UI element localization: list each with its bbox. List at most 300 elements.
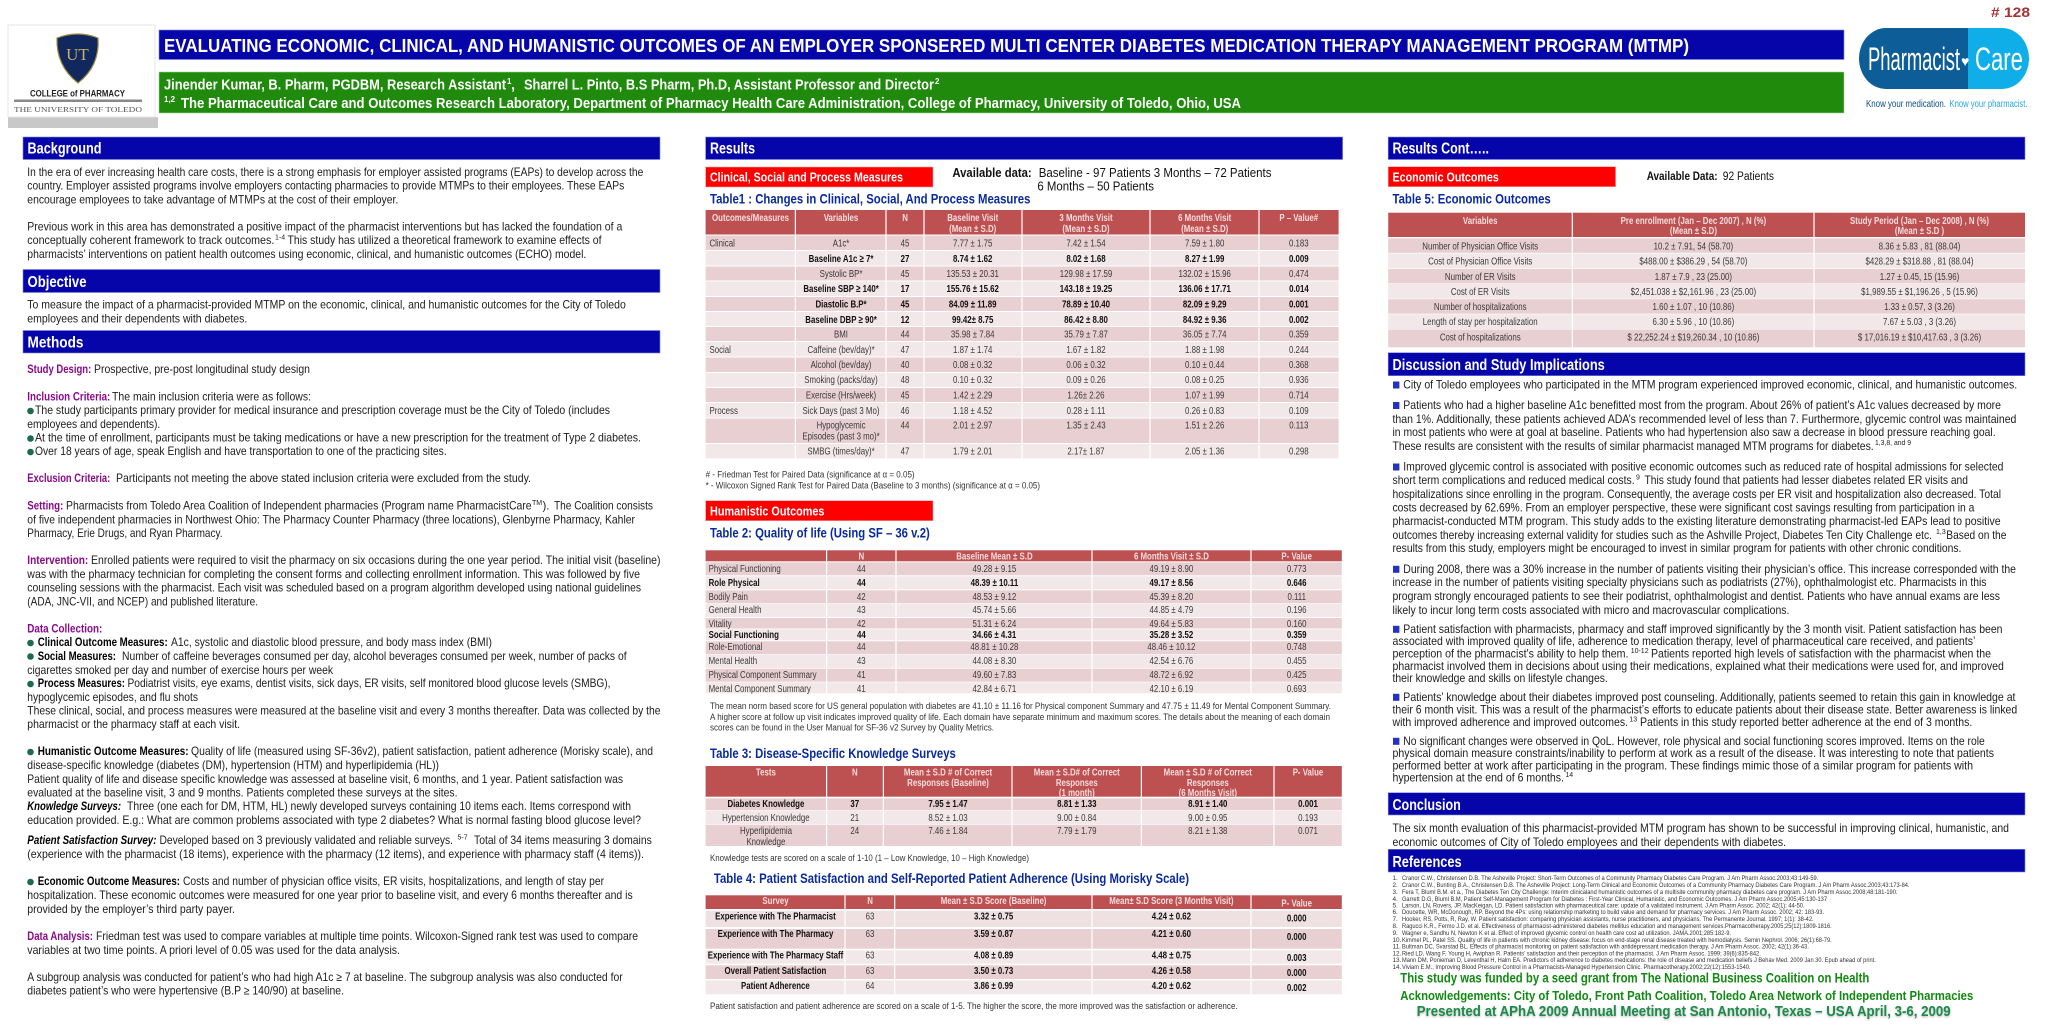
table 4 rows: 3.50 ± 0.73 [974,965,1013,976]
table 4 rows: Patient Adherence [741,980,810,991]
table 1 rows: 155.76 ± 15.62 [946,283,999,294]
table 2 rows: 0.748 [1287,641,1307,652]
text block: background paragraphs: country. Employer assisted programs involve employers contacting pharmacies to provide MTMPs to their employees. These EAPs [27,180,624,192]
subheading: humanistic outcomes: Humanistic Outcomes [710,504,824,518]
table 4 rows: 0.003 [1287,952,1307,963]
authors and affiliation banner: 1,2 [164,95,176,104]
subheading: humanistic outcomes [706,501,933,521]
reference list: 6. [1392,909,1398,916]
text block: economic measures [27,875,633,916]
text block: table 2 note: scores can be found in the User Manual for SF-36 v2 Survey by Quality Metrics. [710,722,994,734]
text block: background paragraphs: Previous work in this area has demonstrated a positive impact of the pharmacist interventions but has lacked the foundation of a [27,220,623,234]
table 2 rows: 44 [857,563,866,574]
text block: data collection: Number of caffeine beverages consumed per day, alcohol beverages consumed per week, number of packs of [122,650,627,663]
heading: table 2: Table 2: Quality of life (Using SF – 36 v.2) [710,526,930,540]
reference list: 12. [1392,950,1402,958]
text block: data analysis [27,930,638,998]
heading: references [1388,849,2025,872]
icon: UT shield: UT [66,45,89,64]
text block: study design and criteria: At the time of enrollment, participants must be taking medications or have a new prescription for the treatment of Type 2 diabetes. [35,432,641,444]
table 1 rows: 1.42 ± 2.29 [953,389,992,401]
text block: acknowledgements: Acknowledgements: City of Toledo, Front Path Coalition, Toledo Area Network of Independent Pharmacies [1400,988,1973,1003]
table 3 header: (6 Months Visit) [1179,787,1237,798]
text block: humanistic measures: Three (one each for DM, HTM, HL) newly developed surveys containing 10 items each. Items correspond with [127,800,631,813]
table 4 rows: 4.08 ± 0.89 [974,949,1013,961]
text block: background paragraphs: In the era of ever increasing health care costs, there is a strong emphasis for employer assisted programs (EAPs) to develop across the [27,166,643,179]
table 1 rows: 1.26± 2.26 [1067,389,1105,401]
panel: results continued [1388,137,2025,347]
table 2 rows: 0.359 [1287,629,1307,640]
header: logo college of pharmacy: COLLEGE of PHARMACY [30,88,125,98]
table 1 rows: Hypoglycemic [817,419,866,431]
table 2 rows: 45.74 ± 5.66 [973,604,1016,615]
table 1 rows: 48 [901,374,909,385]
table 1 header: (Mean ± S.D) [949,223,996,234]
heading: table 1: Table1 : Changes in Clinical, Social, And Process Measures [710,192,1030,206]
table 2 rows: 51.31 ± 6.24 [973,618,1016,629]
discussion point 5: Patient satisfaction with pharmacists, pharmacy and staff improved significantly by the 3 month visit. Patient satisfaction has been [1403,623,2002,636]
table 2 header: P- Value [1281,550,1312,562]
text block: table 2 note: The mean norm based score for US general population with diabetes are 41.10 ± 11.16 for Physical component Summary and 47.75 ± 11.49 for Mental Component Summary. [710,701,1331,712]
table 5 rows: $1,989.55 ± $1,196.26 , 5 (15.96) [1861,286,1978,297]
table 1 header: Baseline Visit [947,212,998,223]
discussion point 4 [1392,563,2016,617]
table 4 rows: Experience with The Pharmacy Staff [708,949,844,961]
table 1 header: Outcomes/Measures [712,212,789,223]
table 2 rows: 48.72 ± 6.92 [1150,669,1193,680]
table 1 rows: 47 [901,344,909,355]
discussion point 4: increase in the number of patients visiting specialty physicians such as podiatrists (27%), ophthalmologist etc. Pharmacists in this [1392,576,1987,589]
table 2 rows: Role Physical [709,577,760,588]
table 1 rows: 27 [901,253,909,264]
discussion point 4: program strongly encouraged patients to see their podiatrist, ophthalmologist and dentist. Patients who have annual exams are less [1392,590,2000,603]
panel: methods [23,330,661,998]
table 1 rows: 2.17± 1.87 [1067,445,1105,457]
text block: study design and criteria: Over 18 years of age, speak English and have transportation to one of the practicing sites. [35,445,447,458]
discussion point 7: hypertension at the end of 6 months. [1392,772,1564,784]
table 1 rows: Process [710,405,738,416]
table 4 rows: Experience with The Pharmacy [718,928,834,939]
table 4 rows [708,910,1307,993]
table 2 rows: 49.19 ± 8.90 [1150,563,1193,574]
header: logo college of pharmacy: THE UNIVERSITY OF TOLEDO [14,105,143,114]
text block: data analysis: Friedman test was used to compare variables at multiple time points. Wilcoxon-Signed rank test was used to compare [96,930,638,943]
table 3 rows: 8.52 ± 1.03 [928,812,968,823]
table 2 rows: Vitality [709,618,732,629]
table 1 rows: 12 [901,314,909,325]
table 1 rows: Diastolic B.P* [815,298,867,310]
table 1 header: (Mean ± S.D) [1181,223,1228,234]
authors and affiliation banner: , [511,78,515,94]
table 2 rows: 42.10 ± 6.19 [1150,683,1193,694]
text block: available data economic: 92 Patients [1723,171,1774,183]
heading: discussion: Discussion and Study Implications [1392,357,1605,374]
heading: table 5: Table 5: Economic Outcomes [1392,192,1551,206]
table 4 rows: 64 [866,980,874,991]
table 5 header: (Mean ± S.D ) [1895,225,1944,236]
table 1 rows: BMI [834,328,848,340]
table 1 rows: 1.67 ± 1.82 [1066,344,1106,355]
text block: humanistic measures: Total of 34 items measuring 3 domains [474,834,652,847]
text block: data collection: Data Collection: [27,622,102,636]
table 4 header [762,895,1312,909]
table 3 rows: 7.46 ± 1.84 [928,825,968,836]
table 3 header: N [852,766,858,778]
heading: table 3: Table 3: Disease-Specific Knowledge Surveys [710,746,956,761]
table 2 rows: 0.196 [1287,604,1307,615]
reference list: 11. [1392,944,1401,950]
text block: humanistic measures: Knowledge Surveys: [27,800,121,813]
table 4 rows: 3.32 ± 0.75 [974,910,1013,922]
table 1 rows: 46 [901,405,909,416]
table 3 rows: 7.95 ± 1.47 [928,798,968,809]
logo: PharmacistCare [1859,28,2029,110]
logo: PharmacistCare: Know your medication. [1866,99,1946,110]
table 1 rows: 1.35 ± 2.43 [1066,419,1106,431]
table 3 rows: 24 [850,825,859,836]
text block: table 1 footnotes: # - Friedman Test for Paired Data (significance at α = 0.05) [706,470,915,480]
text block: setting: Pharmacists from Toledo Area Coalition of Independent pharmacies (Program name PharmacistCare [66,500,532,512]
text block: humanistic measures: disease-specific knowledge (diabetes (DM), hypertension (HTM) and hyperlipidemia (HL)) [27,759,439,772]
table 1 rows: Episodes (past 3 mo)* [802,430,880,442]
table 1 [706,210,1339,458]
subheading: economic outcomes: Economic Outcomes [1392,170,1499,184]
table 2 rows: 49.28 ± 9.15 [973,563,1016,574]
table 1 rows: Exercise (Hrs/week) [806,389,876,401]
table 5 [1388,213,2025,347]
subheading: economic outcomes [1388,167,1616,187]
text block: data analysis: variables at two time points. A priori level of 0.05 was used for the data analysis. [27,944,400,957]
table 1 rows: Baseline DBP ≥ 90* [805,314,877,325]
title banner: EVALUATING ECONOMIC, CLINICAL, AND HUMANISTIC OUTCOMES OF AN EMPLOYER SPONSERED MULTI CENTER DIABETES MEDICATION THERAPY MANAGEMENT PROGRAM (MTMP) [164,36,1689,56]
text block: available data: Baseline - 97 Patients 3 Months – 72 Patients [1039,165,1272,180]
reference list: 14. [1392,964,1402,971]
heading: background: Background [28,140,102,158]
table 3 rows: 21 [850,812,859,823]
reference list: Wagner e, Sandhu N, Newton K et al. Effect of improved glycemic control on health care cost ad utilization. JAMA.2001;285:182-9. [1402,930,1731,937]
text block: intervention: Enrolled patients were required to visit the pharmacy on six occasions during the one year period. The initial visit (baseline) [91,554,661,567]
table 1 rows: Social [710,344,731,355]
table 2 rows: 49.64 ± 5.83 [1150,618,1193,629]
table 1 rows: Baseline SBP ≥ 140* [803,283,879,294]
text block: available data economic [1647,171,1774,183]
text block: humanistic measures: (experience with the pharmacist (18 items), experience with the pharmacy (12 items), and experience with pharmacy staff (4 items)). [27,848,644,861]
table 1 rows: A1c* [833,237,850,249]
reference list: 5. [1392,902,1398,910]
table 2 rows: 44.08 ± 8.30 [973,655,1016,666]
text block: economic measures: hospitalization. These economic outcomes were measured for one year prior to baseline visit, and every 6 months thereafter and is [27,889,633,902]
text block: data analysis: A subgroup analysis was conducted for patient’s who had high A1c ≥ 7 at baseline. The subgroup analysis was also conducted for [27,971,623,984]
table 1 header: Variables [824,212,858,223]
table 1 rows: 45 [901,237,909,249]
discussion point 6 [1392,691,2017,729]
text block: data collection: Clinical Outcome Measures: [38,636,168,649]
table 1 rows: 0.244 [1289,344,1309,355]
text block: table 1 footnotes: * - Wilcoxon Signed Rank Test for Paired Data (Baseline to 3 months) (significance at α = 0.05) [706,480,1040,492]
reference list: 1. [1392,875,1398,882]
table 1 rows: 8.02 ± 1.68 [1066,253,1106,264]
text block: data collection: pharmacist or the pharmacy staff at each visit. [27,718,240,731]
table 1 rows: 78.89 ± 10.40 [1062,298,1110,310]
text block: data collection: These clinical, social, and process measures were measured at the baseline visit and every 3 months thereafter. Data was collected by the [27,704,661,718]
table 2 rows: 0.111 [1287,591,1306,602]
discussion point 6: 13 [1629,716,1637,724]
table 3 rows: Hypertension Knowledge [722,812,810,823]
heading: objective [23,270,660,292]
table 2 rows: 48.39 ± 10.11 [971,577,1018,588]
heading: methods: Methods [28,334,84,352]
authors and affiliation banner: The Pharmaceutical Care and Outcomes Research Laboratory, Department of Pharmacy Health Care Administration, College of Pharmacy, University of Toledo, Ohio, USA [181,96,1241,112]
heading: results cont: Results Cont….. [1392,140,1489,158]
table 2 rows: Mental Component Summary [709,683,811,694]
panel: objective [23,270,660,326]
table 4 rows: 4.24 ± 0.62 [1152,910,1191,922]
table 5 rows: 6.30 ± 5.96 , 10 (10.86) [1653,316,1734,327]
reference list: Cranor C.W., Bunting B.A., Christensen D.B. The Asheville Project: Long-Term Clinical and Economic Outcomes of a Community Pharmacy Diabetes Care Program. J Am Pharm Assoc.2003;43:173-84. [1402,882,1910,889]
table 1 rows [710,237,1309,457]
table 1 rows: 0.368 [1289,359,1309,370]
table 2 rows: 42.84 ± 6.71 [973,683,1016,694]
text block: study design and criteria: Inclusion Criteria: [27,390,110,404]
table 1 rows: SMBG (times/day)* [807,445,875,457]
table 4 header: P- Value [1281,897,1312,909]
table 4 rows: 0.000 [1287,967,1307,978]
text block: study design and criteria: Study Design: [27,363,91,376]
icon: UT shield [57,34,98,83]
table 3 header: P- Value [1293,766,1323,778]
discussion point 7: 14 [1565,772,1573,779]
authors and affiliation banner [159,72,1844,113]
table 2 [706,550,1342,694]
table 1 rows: 0.08 ± 0.32 [953,359,992,370]
table 5 rows: 1.87 ± 7.9 , 23 (25.00) [1655,271,1732,282]
table 5 rows: Cost of hospitalizations [1440,331,1521,343]
authors and affiliation banner: Jinender Kumar, B. Pharm, PGDBM, Research Assistant [164,78,506,94]
table 2 header: 6 Months Visit ± S.D [1134,550,1209,562]
table 2 rows: Bodily Pain [709,591,748,602]
table 2 rows: 0.425 [1287,669,1307,680]
table 1 rows: Alcohol (bev/day) [811,359,871,370]
table 1 rows: 1.18 ± 4.52 [953,405,992,416]
table 1 rows: 7.42 ± 1.54 [1066,237,1106,249]
discussion point 5: their knowledge and skills on lifestyle changes. [1392,672,1608,685]
panel: discussion and study implications [1388,353,2025,784]
text block: humanistic measures: Patient Satisfaction Survey: [27,834,157,847]
table 2 rows: Mental Health [709,655,757,666]
discussion point 6: with improved adherence and improved outcomes. [1392,716,1628,729]
table 3 rows: 8.21 ± 1.38 [1188,825,1227,836]
text block: objective [27,298,626,326]
table 2 rows: 44.85 ± 4.79 [1150,604,1193,615]
panel: references [1388,849,2025,971]
table 1 header: 3 Months Visit [1059,212,1113,223]
table 4 rows: 4.48 ± 0.75 [1152,949,1191,961]
title banner [159,30,1844,60]
table 2 rows: 42 [857,591,866,602]
table 4 header: N [867,895,873,906]
table 5 rows: Number of hospitalizations [1434,301,1527,312]
text block: study design and criteria [27,363,641,485]
table 1 rows: 47 [901,445,909,457]
table 1 rows: 35.98 ± 7.84 [951,328,995,340]
text block: background paragraphs: This study has utilized a theoretical framework to examine effects of [288,234,602,247]
table 1 rows: 0.009 [1289,253,1309,264]
table 3 header: Responses [1056,777,1098,788]
table 2 rows: 34.66 ± 4.31 [973,629,1016,640]
table 2 rows: 48.53 ± 9.12 [973,591,1016,602]
authors and affiliation banner: 1 [507,77,512,86]
text block: background paragraphs: pharmacists’ interventions on patient health outcomes using economic, clinical, and humanistic outcomes (ECHO) model. [27,248,586,261]
poster number: # 128 [1991,4,2030,20]
table 2 rows: 45.39 ± 8.20 [1150,591,1193,602]
text block: background paragraphs: conceptually coherent framework to track outcomes. [27,234,274,247]
table 1 rows: 0.359 [1289,328,1309,340]
discussion point 3: short term complications and reduced medical costs. [1392,474,1635,487]
text block: funding: This study was funded by a seed grant from The National Business Coalition on Health [1400,970,1869,986]
logo: PharmacistCare: ♥ [1961,53,1969,69]
table 1 rows: 0.002 [1289,314,1309,325]
text block: data analysis: Data Analysis: [27,930,93,943]
table 4 rows: 4.20 ± 0.62 [1152,980,1191,991]
discussion point 7: performed better at work after participating in the program. These findings mimic those of a similar program for patients with [1392,760,1973,772]
table 1 rows: 1.88 ± 1.98 [1185,344,1224,355]
table 1 header: P – Value# [1279,212,1318,223]
subheading: clinical social process: Clinical, Social and Process Measures [710,170,903,184]
discussion point 4: likely to incur long term costs associated with micro and macrovascular complications. [1392,604,1789,617]
discussion point 3 [1392,460,2006,555]
table 1 rows: 0.001 [1289,298,1309,310]
table 1 rows: Systolic BP* [820,268,863,279]
table 1 rows: 0.714 [1289,389,1309,401]
table 5 rows: Cost of Physician Office Visits [1428,255,1533,267]
table 1 rows: 132.02 ± 15.96 [1178,268,1231,279]
table 3 rows [722,798,1318,847]
reference list: Ried LD, Wang F, Young H, Awiphan R. Patients' satisfaction and their perception of the pharmacist. J Am Pharm Assoc. 1999; 39(6):835-842. [1402,950,1761,958]
panel: conclusion [1388,793,2025,849]
text block: conclusion [1392,822,2009,849]
table 4 rows: 0.000 [1287,912,1307,924]
text block: economic measures: Costs and number of physician office visits, ER visits, hospitalizations, and length of stay per [183,875,604,888]
text block: economic measures: provided by the employer’s third party payer. [27,903,235,916]
table 5 rows: $ 22,252.24 ± $19,260.34 , 10 (10.86) [1627,331,1759,343]
text block: available data [952,165,1272,194]
reference list: Bultman DC, Svarstad BL. Effects of pharmacist monitoring on patient satisfaction with antidepressant medication therapy. J Am Pharm Assoc. 2002; 42(1):36-43. [1402,944,1809,950]
text block: table 3 note: Knowledge tests are scored on a scale of 1-10 (1 – Low Knowledge, 10 – High Knowledge) [710,853,1029,864]
heading: results cont [1388,137,2025,160]
panel: background [23,137,660,261]
text block: table 2 note: A higher score at follow up visit indicates improved quality of life. Each domain have separate minimum and maximum scores. The details about the meaning of each domain [710,712,1330,723]
discussion point 3: pharmacist-conducted MTM program. This study adds to the existing literature demonstrating pharmacist-led EAPs lead to positive [1392,515,2001,528]
heading: background [23,137,660,160]
table 2 rows: 0.160 [1287,618,1307,629]
table 2 rows: 48.46 ± 10.12 [1147,641,1195,652]
table 1 rows: 17 [901,283,909,294]
table 2 rows: 43 [857,604,866,615]
reference list: Viviam E.M., Improving Blood Pressure Control in a Pharmacists-Managed Hypertension Clinic. Pharmacotherapy.2002;22(12):1553-1540. [1402,964,1751,971]
table 1 rows: 0.08 ± 0.25 [1185,374,1224,385]
table 4 rows: Overall Patient Satisfaction [725,965,827,976]
discussion point 6: Patients in this study reported better adherence at the end of 3 months. [1640,716,1972,729]
table 1 rows: Baseline A1c ≥ 7* [809,253,874,264]
table 2 rows: 49.60 ± 7.83 [973,669,1016,680]
discussion point 5: pharmacist involved them in decisions about using their medications, explained what their medications were used for, and improved [1392,660,2004,673]
discussion point 2: 1,3,8, and 9 [1875,440,1911,447]
table 3 rows: 0.001 [1298,798,1318,809]
discussion point 3: outcomes thereby increasing external validity for studies such as the Ashville Project, Diabetes Ten City Challenge etc. [1392,529,1932,542]
authors and affiliation banner: Sharrel L. Pinto, B.S Pharm, Ph.D, Assistant Professor and Director [524,78,934,94]
discussion point 5: associated with improved quality of life, adherence to medication therapy, level of pharmaceutical care received, and patients’ [1392,635,1975,648]
discussion point 3: This study found that patients had lesser diabetes related ER visits and [1644,474,1968,487]
table 1 rows: 0.10 ± 0.44 [1185,359,1224,370]
table 1 rows: 45 [901,268,909,279]
reference list: Fera T, Bluml B.M. et a., The Diabetes Ten City Challenge: Interim clinicaland humanistic outcomes of a multisite community pharmacy diabetes care program. J Am Pharm Assoc.2008;48:181-190. [1402,889,1898,896]
table 1 rows: 2.05 ± 1.36 [1185,445,1224,457]
text block: conclusion: economic outcomes of City of Toledo employees and their dependents with diabetes. [1392,836,1786,849]
logo: PharmacistCare: Care [1975,41,2023,77]
text block: study design and criteria: Exclusion Criteria: [27,472,110,485]
table 5 rows: 7.67 ± 5.03 , 3 (3.26) [1883,316,1956,327]
discussion point 5: perception of the pharmacist's ability to help them. [1392,648,1628,660]
table 1 rows: 143.18 ± 19.25 [1060,283,1112,294]
table 4 rows: 63 [866,928,874,939]
text block: available data: Available data: [952,165,1032,180]
text block: intervention: Intervention: [27,554,88,567]
table 2 rows: 42 [857,618,866,629]
text block: data collection [27,622,660,731]
text block: humanistic measures: evaluated at the baseline visit, 3 and 9 months. Patients completed these surveys at the sites. [27,786,458,800]
table 3 rows: Diabetes Knowledge [727,798,804,809]
table 1 rows: 7.77 ± 1.75 [953,237,992,249]
header: logo college of pharmacy [8,25,158,128]
table 4 rows: 3.59 ± 0.87 [974,928,1013,939]
table 5 header: Study Period (Jan – Dec 2008) , N (%) [1850,215,1989,226]
reference list: Garrett D.G, Bluml B.M, Patient Self-Management Program for Diabetes : First-Year Clinical, Humanistic, and Economic Outcomes. J Am Pharm Assoc.2005;45:130-137 [1402,896,1827,903]
table 3 rows: 0.193 [1298,812,1318,823]
table 5 rows: 10.2 ± 7.91, 54 (58.70) [1654,240,1733,252]
text block: data collection: Process Measures: [38,677,125,690]
table 1 rows: 0.474 [1289,268,1309,279]
table 1 rows: 0.109 [1289,405,1309,416]
reference list: Doucette, WR, McDonough, RP. Beyond the 4Ps: using relationship marketing to build value and demand for pharmacy services. J Am Pharm Assoc. 2002; 42: 183-93. [1402,909,1824,916]
text block: background paragraphs [27,166,643,261]
discussion point 2 [1392,399,2016,453]
heading: methods [23,330,660,353]
table 2 rows: 44 [857,577,867,588]
discussion point 7 [1392,735,1994,784]
text block: setting: of five independent pharmacies in Northwest Ohio: The Pharmacy Counter Pharmacy (three locations), Glenbyrne Pharmacy, Kahler [27,514,635,526]
text block: table 2 note [710,701,1331,734]
table 2 rows: Physical Component Summary [709,669,817,680]
table 3 rows: Hyperlipidemia [740,825,793,836]
heading: objective: Objective [28,274,87,291]
table 2 rows: 43 [857,655,866,666]
table 3 rows: 0.071 [1298,825,1318,836]
table 1 rows: 36.05 ± 7.74 [1183,328,1227,340]
table 2 header: Baseline Mean ± S.D [956,550,1033,562]
text block: data collection: Podiatrist visits, eye exams, dentist visits, sick days, ER visits, self monitored blood glucose levels (SMBG), [128,677,610,690]
table 5 rows: 1.33 ± 0.57, 3 (3.26) [1884,301,1955,312]
table 1 rows: 0.936 [1289,374,1309,385]
table 2 rows: 44 [857,629,867,640]
discussion point 7: physical domain measure constraints/inability to perform at work as a result of the disease. It was interesting to note that patients [1392,747,1994,760]
table 3 header: Responses (Baseline) [907,777,989,788]
table 1 rows: 82.09 ± 9.29 [1183,298,1227,310]
table 1 rows: 1.07 ± 1.99 [1185,389,1224,401]
table 1 rows: Clinical [710,237,735,249]
table 1 rows: 135.53 ± 20.31 [946,268,999,279]
reference list: 4. [1392,896,1398,903]
text block: data collection: A1c, systolic and diastolic blood pressure, and body mass index (BMI) [171,636,492,649]
